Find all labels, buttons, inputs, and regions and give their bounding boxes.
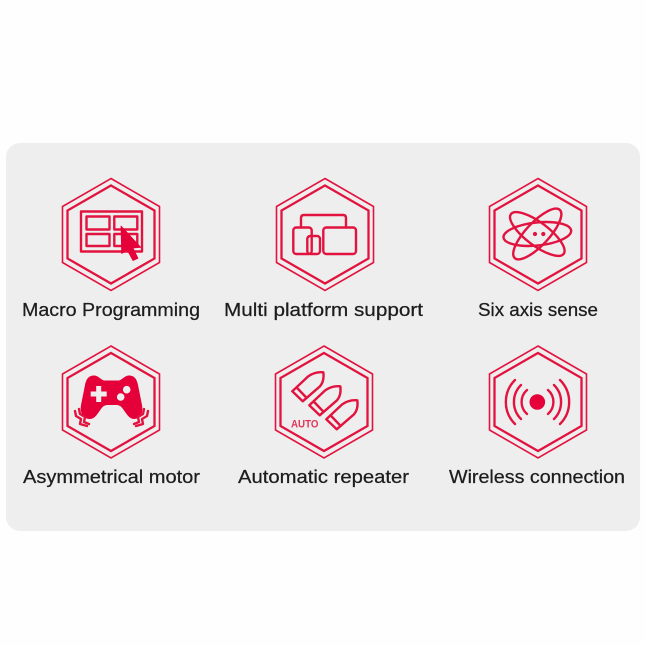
icon: wireless connection (490, 346, 586, 458)
label: multi platform: Multi platform support (224, 299, 423, 320)
icon: six axis sense (490, 178, 586, 290)
icon: automatic repeater: AUTO (291, 418, 319, 430)
icon: automatic repeater (276, 346, 372, 458)
panel: feature card (6, 143, 640, 531)
label: six axis sense: Six axis sense (478, 299, 598, 320)
icon: macro programming (62, 178, 160, 290)
icon: multi platform (276, 178, 374, 290)
label: automatic repeater: Automatic repeater (238, 466, 409, 487)
label: asymmetrical motor: Asymmetrical motor (23, 466, 200, 487)
label: wireless connection: Wireless connection (449, 466, 625, 487)
label: macro programming: Macro Programming (22, 299, 200, 320)
icon: asymmetrical motor (62, 346, 160, 458)
